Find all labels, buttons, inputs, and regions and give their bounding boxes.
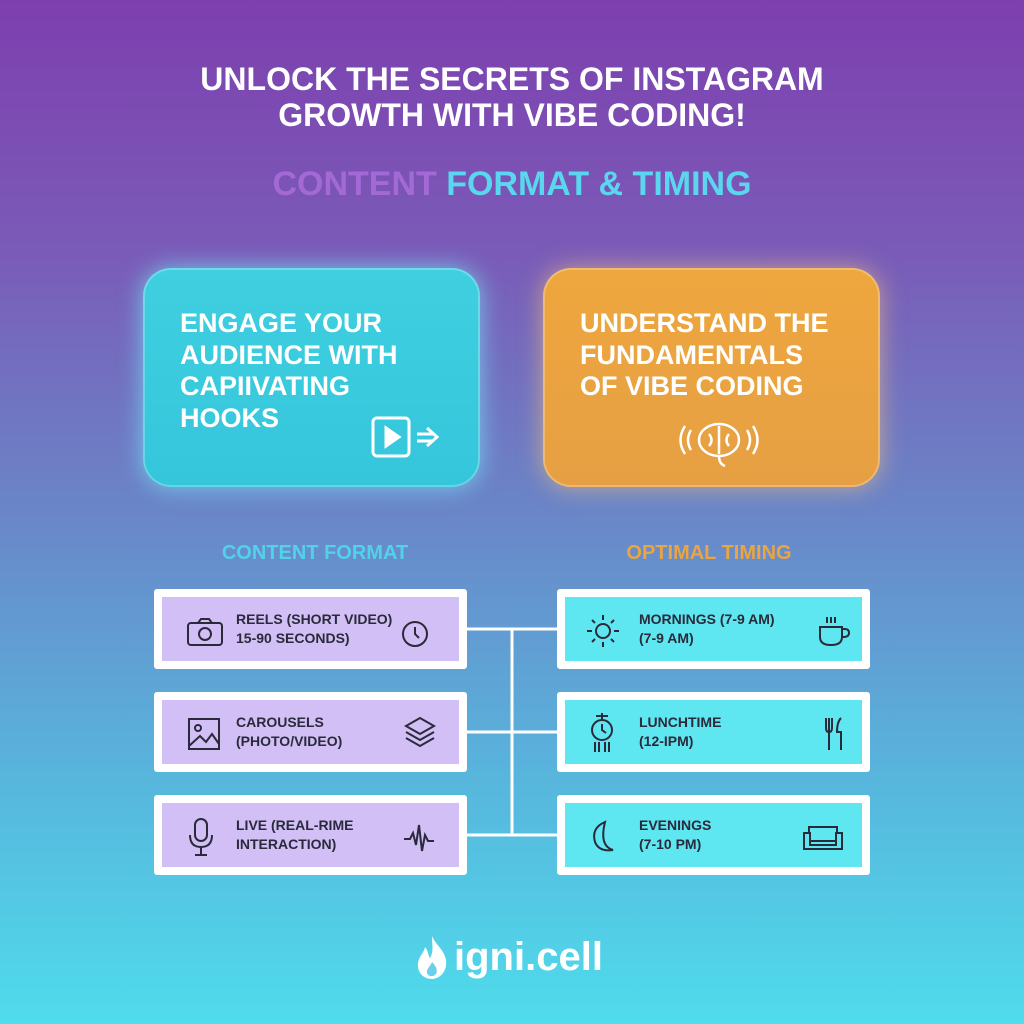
row: live: LIVE (REAL-RIME: [236, 817, 353, 833]
icon: brain: [679, 422, 759, 468]
title: GROWTH WITH VIBE CODING!: [278, 97, 746, 133]
row: reels: REELS (SHORT VIDEO): [236, 611, 392, 627]
title: [200, 61, 824, 133]
row: evenings: EVENINGS: [639, 817, 711, 833]
icon: flame: [418, 936, 446, 979]
row: carousels: (PHOTO/VIDEO): [236, 733, 342, 749]
row: lunchtime: [557, 692, 870, 772]
row: live: [154, 795, 467, 875]
card: vibe coding: FUNDAMENTALS: [580, 340, 803, 370]
heading: content format: CONTENT FORMAT: [222, 542, 408, 564]
card: hooks: HOOKS: [180, 402, 279, 432]
title: UNLOCK THE SECRETS OF INSTAGRAM: [200, 61, 824, 97]
card: vibe coding: UNDERSTAND THE: [580, 308, 828, 338]
row: mornings: MORNINGS (7-9 AM): [639, 611, 775, 627]
card: vibe coding: OF VIBE CODING: [580, 371, 804, 401]
icon: play arrow: [372, 416, 440, 458]
row: mornings: [557, 589, 870, 669]
row: lunchtime: (12-IPM): [639, 733, 693, 749]
row: live: INTERACTION): [236, 836, 336, 852]
row: lunchtime: LUNCHTIME: [639, 714, 721, 730]
row: carousels: [154, 692, 467, 772]
heading: optimal timing: OPTIMAL TIMING: [626, 542, 792, 564]
row: reels: 15-90 SECONDS): [236, 630, 350, 646]
card: vibe coding: [543, 268, 880, 487]
logo: igni.cell: [454, 935, 603, 979]
row: evenings: [557, 795, 870, 875]
row: reels: [154, 589, 467, 669]
card: hooks: CAPIIVATING: [180, 371, 350, 401]
row: evenings: (7-10 PM): [639, 836, 701, 852]
row: carousels: CAROUSELS: [236, 714, 324, 730]
subtitle: CONTENT FORMAT & TIMING: [272, 165, 752, 203]
card: hooks: [143, 268, 480, 487]
card: hooks: AUDIENCE WITH: [180, 340, 398, 370]
row: mornings: (7-9 AM): [639, 630, 694, 646]
card: hooks: ENGAGE YOUR: [180, 308, 382, 338]
